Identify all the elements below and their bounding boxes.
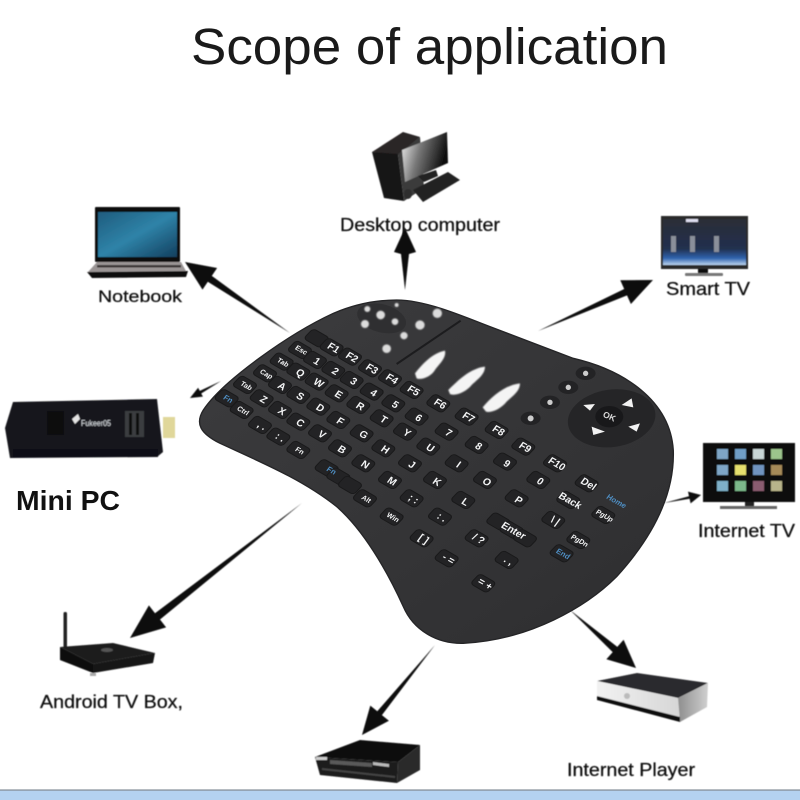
- key labels: U: [423, 442, 436, 455]
- key labels: L: [459, 497, 471, 509]
- key labels: Home: [605, 492, 629, 510]
- keys: [214, 328, 616, 593]
- key labels: 7: [442, 428, 454, 440]
- icon: android TV box: [60, 612, 155, 676]
- key labels: F3: [363, 362, 380, 377]
- key labels: B: [335, 444, 348, 457]
- key labels: 5: [389, 399, 401, 411]
- key labels: Fn: [325, 465, 338, 477]
- key labels: . ,: [501, 555, 515, 568]
- key labels: F5: [405, 384, 422, 399]
- key labels: Alt: [360, 494, 373, 505]
- key labels: Fn: [221, 393, 235, 405]
- key labels: W: [311, 377, 326, 391]
- key labels: PgDn: [569, 533, 590, 549]
- label: smart TV: Smart TV: [666, 279, 750, 299]
- icon: mini PC stick: Fukeer05: [81, 419, 111, 428]
- key labels: 3: [347, 376, 359, 388]
- key labels: F9: [516, 441, 533, 455]
- key labels: H: [378, 444, 391, 457]
- icon: mini PC stick: [5, 399, 175, 458]
- keyboard: wireless mini keyboard with touchpad: [199, 298, 673, 643]
- key labels: Tab: [275, 357, 291, 369]
- key labels: = +: [475, 577, 494, 593]
- key labels: V: [315, 429, 328, 442]
- key labels: ; :: [406, 493, 421, 506]
- key labels: Q: [293, 367, 307, 380]
- arrow: to internet player: [570, 610, 636, 668]
- key labels: K: [430, 476, 443, 489]
- key labels: 6: [412, 413, 424, 425]
- key labels: End: [554, 547, 572, 561]
- label: internet player: Internet Player: [567, 760, 695, 780]
- key labels: D: [313, 402, 326, 415]
- key labels: - =: [440, 552, 457, 567]
- arrow: to notebook: [185, 262, 290, 333]
- key labels: S: [294, 391, 306, 403]
- key labels: I: [454, 460, 463, 471]
- icon: desktop computer: [372, 132, 460, 202]
- icon: internet TV: [703, 443, 795, 509]
- key labels: Tab: [239, 380, 254, 393]
- title: Scope of application: [191, 18, 668, 75]
- icon: internet player: [597, 673, 708, 722]
- key labels: , .: [255, 420, 269, 433]
- arrow: to smart TV: [538, 280, 653, 331]
- key labels: Fn: [293, 446, 306, 456]
- key labels: F10: [546, 456, 568, 474]
- key labels: F2: [343, 351, 360, 365]
- key labels: C: [293, 417, 307, 430]
- key labels: \ |: [548, 515, 562, 528]
- key labels: 0: [534, 476, 546, 488]
- icon: smart TV: [661, 216, 748, 276]
- key labels: Win: [385, 511, 401, 524]
- key labels: F7: [460, 411, 477, 425]
- key labels: G: [356, 429, 370, 442]
- label: android TV box: Android TV Box,: [40, 692, 183, 712]
- key labels: Z: [257, 394, 269, 406]
- key labels: J: [406, 459, 417, 471]
- label: mini PC: Mini PC: [16, 485, 120, 516]
- key labels: 4: [367, 388, 379, 400]
- arrow: to DVD player: [362, 645, 435, 735]
- key labels: A: [275, 381, 289, 394]
- function buttons cluster: [354, 298, 442, 353]
- icon: notebook: [87, 207, 188, 278]
- icon: DVD player: [315, 740, 420, 783]
- d-pad: [564, 384, 659, 453]
- key labels: O: [480, 476, 493, 489]
- key labels: 8: [472, 441, 484, 453]
- key labels: T: [377, 414, 390, 427]
- key labels: F: [334, 416, 346, 428]
- key labels: Esc: [293, 344, 309, 357]
- key labels: E: [332, 389, 345, 402]
- arrow: to mini PC: [190, 381, 221, 398]
- key labels: F8: [490, 424, 507, 439]
- key labels: Ctrl: [235, 405, 251, 417]
- key labels: X: [275, 406, 288, 418]
- key labels: Y: [400, 428, 413, 440]
- key labels: 9: [501, 458, 512, 470]
- key labels: : .: [434, 511, 449, 525]
- arrow: to internet TV: [664, 492, 701, 503]
- key labels: Cap: [258, 368, 275, 381]
- key labels: N: [358, 459, 371, 472]
- touchpad: [397, 321, 520, 412]
- key labels: Enter: [499, 520, 528, 542]
- key labels: PgUp: [594, 508, 615, 524]
- arrow: to android TV box: [130, 503, 302, 638]
- bottom window bar: [0, 790, 800, 800]
- key labels: R: [353, 401, 367, 414]
- key labels: [ ]: [416, 533, 431, 546]
- key labels: Back: [556, 491, 584, 512]
- key labels: Del: [578, 476, 598, 493]
- key labels: F4: [383, 372, 400, 387]
- d-pad: OK: [601, 409, 618, 424]
- key labels: 2: [329, 366, 341, 378]
- key labels: [221, 341, 629, 593]
- key labels: F1: [325, 341, 342, 356]
- label: notebook: Notebook: [98, 287, 183, 306]
- key labels: M: [385, 475, 398, 488]
- media buttons: [521, 367, 596, 425]
- key labels: 1: [311, 356, 322, 368]
- label: internet TV: Internet TV: [698, 521, 795, 541]
- arrow: to desktop computer: [394, 228, 416, 290]
- label: desktop computer: Desktop computer: [340, 215, 500, 235]
- key labels: / ?: [470, 532, 487, 547]
- keyboard body: [199, 300, 673, 643]
- key labels: P: [512, 495, 525, 507]
- key labels: : .: [273, 431, 287, 445]
- key labels: F6: [431, 397, 449, 412]
